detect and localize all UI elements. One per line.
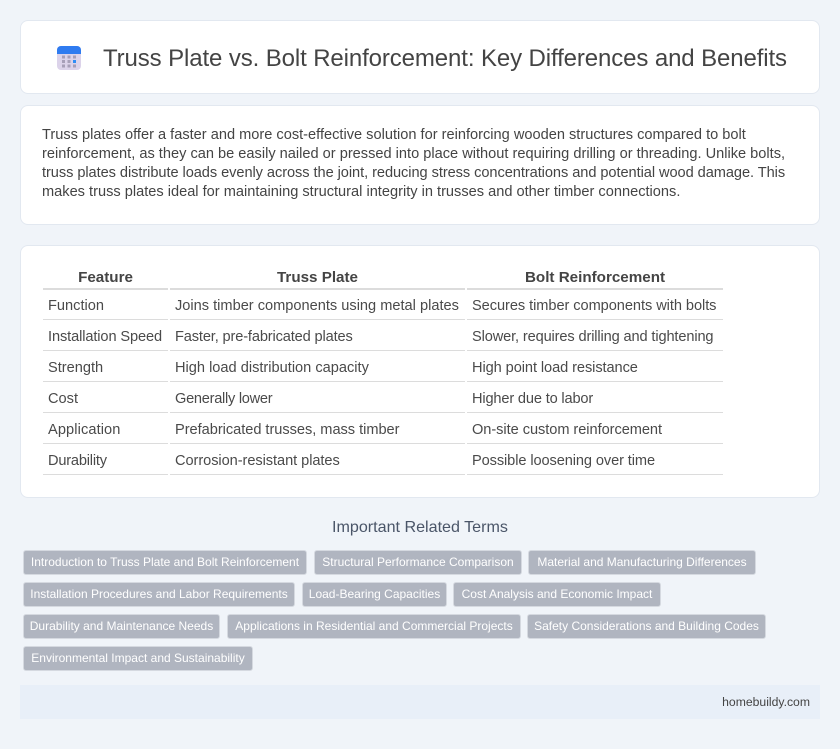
comparison table: Faster, pre-fabricated plates (175, 329, 353, 345)
comparison table: Secures timber components with bolts (472, 298, 716, 314)
text block: intro paragraph (42, 127, 785, 200)
tag list: related terms: Load-Bearing Capacities (309, 587, 440, 601)
tag list: related terms: Environmental Impact and Sustainability (31, 651, 245, 665)
panel: title header (20, 20, 820, 94)
tag list: related terms: Structural Performance Comparison (322, 555, 514, 569)
tag list: related terms: Installation Procedures and Labor Requirements (30, 587, 288, 601)
footer bar (20, 685, 820, 719)
comparison table: Function (48, 298, 104, 314)
comparison table: Durability (48, 453, 107, 469)
comparison table: Bolt Reinforcement (525, 269, 665, 286)
comparison table: Installation Speed (48, 329, 162, 345)
tag list: related terms: Cost Analysis and Economic Impact (462, 587, 652, 601)
comparison table: On-site custom reinforcement (472, 422, 662, 438)
tag list: related terms: Applications in Residential and Commercial Projects (235, 619, 513, 633)
tag list: related terms: Introduction to Truss Plate and Bolt Reinforcement (31, 555, 299, 569)
tag list: related terms: Safety Considerations and Building Codes (534, 619, 759, 633)
comparison table: Generally lower (175, 391, 272, 407)
icon: calendar (57, 46, 81, 70)
text block: intro paragraph: Truss plates offer a faster and more cost-effective solution for reinforcing wooden structures compared to bolt (42, 127, 746, 143)
comparison table: Higher due to labor (472, 391, 593, 407)
comparison table: Joins timber components using metal plates (175, 298, 459, 314)
tag list: related terms: Durability and Maintenance Needs (30, 619, 213, 633)
comparison table: Corrosion-resistant plates (175, 453, 340, 469)
comparison table: Possible loosening over time (472, 453, 655, 469)
comparison table: Strength (48, 360, 103, 376)
heading: important related terms: Important Related Terms (332, 518, 508, 536)
panel: intro paragraph (20, 105, 820, 225)
tag list: related terms (23, 550, 766, 671)
tag list: related terms: Material and Manufacturing Differences (537, 555, 747, 569)
panel: comparison table (20, 245, 820, 498)
comparison table: Feature (78, 269, 133, 286)
comparison table: Application (48, 422, 120, 438)
comparison table: Prefabricated trusses, mass timber (175, 422, 399, 438)
text block: intro paragraph: truss plates distribute loads evenly across the joint, reducing stress concentrations and potential wood damage. This (42, 165, 785, 181)
comparison table: Truss Plate (277, 269, 358, 286)
comparison table (43, 269, 723, 475)
comparison table: High load distribution capacity (175, 360, 369, 376)
comparison table: Cost (48, 391, 78, 407)
comparison table: Slower, requires drilling and tightening (472, 329, 713, 345)
title: Truss Plate vs. Bolt Reinforcement: Key Differences and Benefits (103, 45, 787, 72)
text block: intro paragraph: reinforcement, as they can be easily nailed or pressed into place without requiring drilling or threading. Unlike bolts, (42, 146, 785, 162)
footer: site name: homebuildy.com (722, 695, 810, 709)
text block: intro paragraph: makes truss plates ideal for maintaining structural integrity in trusses and other timber connections. (42, 184, 680, 200)
comparison table: High point load resistance (472, 360, 638, 376)
